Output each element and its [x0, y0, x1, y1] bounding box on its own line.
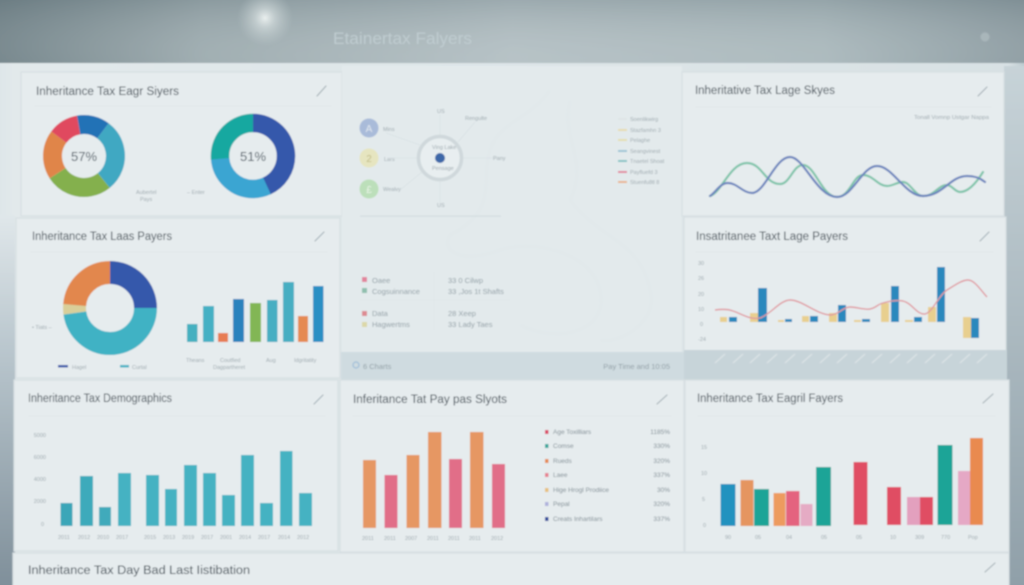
panel: demographics: [14, 380, 338, 551]
light glare: [237, 0, 293, 46]
panel heading: Inheritance Tax Eagril Fayers: [697, 393, 843, 405]
panel heading: Insatritanee Taxt Lage Payers: [696, 231, 848, 243]
data table: 33 ,Jos 1t Shafts: [448, 287, 504, 296]
x axis labels: 2015: [144, 535, 156, 541]
x axis labels: [725, 535, 978, 541]
panel heading: Inheritance Tax Day Bad Last Iistibation: [28, 565, 250, 577]
hub diagram: Wealvy: [383, 187, 401, 193]
x axis labels: 2012: [78, 535, 90, 541]
panel: grouped bars: [685, 380, 1009, 552]
status band: Pay Time and 10:05: [603, 362, 670, 371]
right legend: Seangvinest: [630, 149, 661, 155]
bar chart: [363, 432, 505, 528]
legend list: 320%: [653, 501, 670, 508]
panel: donut charts top left: [21, 72, 342, 216]
x axis labels: 2017: [258, 535, 270, 541]
legend list: 337%: [653, 516, 670, 523]
left node icons: [360, 118, 378, 138]
bar chart: Dagpartheret: [213, 365, 246, 371]
hub diagram: Ving Lake: [432, 145, 456, 151]
legend list: Creats Inhartilars: [553, 516, 603, 523]
right legend: Tnaetel Shoat: [630, 159, 665, 165]
data table: 28 Xeep: [448, 309, 476, 318]
x axis labels: 2011: [384, 536, 396, 542]
blue bars: [729, 267, 979, 338]
bar chart: Coutfied: [220, 358, 240, 364]
header icon: [980, 32, 990, 42]
x axis labels: 90: [725, 535, 731, 541]
panel: donut charts top left: – Enter: [187, 190, 205, 196]
y axis labels: 0: [700, 322, 703, 328]
x axis labels: 309: [915, 535, 924, 541]
donut chart 51%: [220, 123, 286, 189]
edit icon: [315, 232, 324, 241]
status band: 6 Charts: [363, 362, 392, 371]
faint map outline: [447, 90, 652, 341]
legend list: 330%: [653, 443, 670, 450]
x axis labels: 2012: [297, 535, 309, 541]
legend list: Hige Hrogl Prodiice: [553, 487, 609, 494]
hub diagram: Lars: [384, 157, 395, 163]
edit icon: [657, 395, 667, 404]
y axis labels: 20: [698, 292, 704, 298]
data table: 33 Lady Taes: [448, 320, 493, 329]
panel: center overview: [342, 66, 682, 353]
x axis labels: 2011: [427, 536, 439, 542]
y axis labels: -24: [698, 337, 706, 343]
donut value 57%: 57%: [71, 149, 97, 164]
donut chart: [74, 272, 146, 344]
x axis labels: 2007: [405, 536, 417, 542]
x axis labels: [58, 535, 309, 541]
x axis labels: [362, 536, 503, 542]
y axis labels: 0: [703, 523, 706, 529]
hub diagram: Pany: [493, 156, 506, 162]
panel heading: Inheritative Tax Lage Skyes: [695, 85, 835, 97]
bar chart: Theans: [186, 358, 205, 364]
y axis labels: 10: [701, 471, 707, 477]
hub diagram: US: [437, 203, 445, 209]
x axis labels: 10: [890, 535, 896, 541]
legend list: 320%: [653, 458, 670, 465]
y axis labels: 10: [698, 307, 704, 313]
bar chart: Idgritatity: [294, 358, 317, 364]
donut side label: • Tiats –: [32, 325, 53, 331]
donut legend: [58, 365, 147, 371]
edit icon: [314, 395, 323, 404]
y axis labels: [698, 261, 706, 343]
right legend: Pelaghe: [630, 138, 650, 144]
bar chart: Aug: [266, 358, 276, 364]
x axis labels: 05: [856, 535, 862, 541]
x axis labels: 05: [821, 535, 827, 541]
y axis labels: 5000: [34, 433, 46, 439]
x axis labels: 2017: [116, 535, 128, 541]
panel heading: Inferitance Tat Pay pas Slyots: [353, 394, 507, 406]
hatched band: [684, 350, 1007, 380]
x axis labels: 2011: [448, 536, 460, 542]
x axis labels: 2012: [491, 536, 503, 542]
panel: bar chart with legend: [340, 380, 684, 552]
y axis labels: [34, 433, 46, 528]
header bar: [0, 0, 1024, 63]
x axis labels: 2011: [58, 535, 70, 541]
panel heading: Inheritance Tax Demographics: [28, 393, 172, 405]
x axis labels: 2013: [163, 535, 175, 541]
data table: 33 0 Cilwp: [448, 276, 483, 285]
panel: donut and bars: [16, 218, 340, 378]
y axis labels: 15: [701, 445, 707, 451]
legend list: Laee: [553, 472, 568, 479]
x axis labels: 2001: [220, 535, 232, 541]
data table: Cogsuinnance: [372, 287, 420, 296]
legend list: Pepal: [553, 501, 570, 508]
x axis labels: 04: [786, 535, 792, 541]
panel: donut charts top left: Pays: [140, 197, 152, 203]
right legend: Stazfamhn 3: [630, 128, 661, 134]
x axis labels: 2010: [97, 535, 109, 541]
center ring: [418, 136, 462, 180]
trend line: [715, 280, 987, 318]
y axis labels: 0: [41, 522, 44, 528]
legend list: 30%: [657, 487, 670, 494]
donut legend: Hagel: [72, 365, 86, 371]
edit icon: [980, 232, 989, 241]
hub diagram: Mins: [383, 127, 395, 133]
y axis labels: 26: [698, 276, 704, 282]
legend list: 337%: [653, 472, 670, 479]
hub diagram: Rengulte: [465, 116, 487, 122]
y axis labels: 4000: [34, 477, 46, 483]
center dot: [435, 153, 445, 163]
hub diagram: Pensage: [432, 166, 454, 172]
legend list: Rueds: [553, 458, 573, 465]
y axis labels: 5: [702, 497, 705, 503]
data table: Hagwertms: [372, 320, 410, 329]
yellow bars: [720, 303, 971, 338]
x axis labels: 2011: [469, 536, 481, 542]
bar chart: [186, 282, 324, 371]
x axis labels: 2017: [201, 535, 213, 541]
panel: line chart: [682, 72, 1004, 216]
x axis labels: 770: [941, 535, 950, 541]
panel: bottom distribution: [13, 553, 1009, 585]
bar chart: [60, 451, 312, 526]
x axis labels: 05: [755, 535, 761, 541]
right legend: Soenlikwirg: [630, 117, 658, 123]
hub diagram: £: [366, 185, 372, 196]
hub diagram: US: [437, 109, 445, 115]
edit icon: [985, 563, 995, 572]
edit icon: [983, 394, 993, 403]
y axis labels: [701, 445, 707, 529]
legend list: Age Toxilliars: [553, 429, 592, 436]
right legend: Payfluefd 3: [630, 170, 658, 176]
panel: combo chart: [684, 217, 1006, 351]
status band: [341, 352, 684, 380]
donut value 51%: 51%: [240, 149, 266, 164]
hub diagram: 2: [366, 154, 372, 165]
donut chart 57%: [48, 120, 120, 192]
data table: [360, 272, 510, 330]
panel heading: Inheritance Tax Laas Payers: [32, 231, 172, 243]
chart caption: Tonall Vomnp Ustgar Nappa: [914, 115, 990, 121]
edit icon: [978, 87, 987, 96]
edit icon: [317, 86, 326, 96]
donut captions: Aubertel: [136, 190, 156, 196]
y axis labels: 2000: [34, 499, 46, 505]
x axis labels: 2019: [182, 535, 194, 541]
donut legend: Curtal: [132, 365, 147, 371]
right legend: [618, 117, 665, 186]
legend list: 1185%: [650, 429, 670, 436]
panel heading: Inheritance Tax Eagr Siyers: [36, 86, 179, 98]
x axis labels: 2014: [278, 535, 290, 541]
right legend: Stuenfu8tl 8: [630, 180, 659, 186]
legend list: [545, 429, 670, 523]
header title: Etainertax Falyers: [333, 29, 472, 48]
y axis labels: 6000: [34, 455, 46, 461]
line chart: [710, 157, 985, 197]
x axis labels: Pop: [968, 535, 978, 541]
x axis labels: 2014: [239, 535, 251, 541]
hub diagram: [360, 109, 506, 217]
x axis labels: 2011: [362, 536, 374, 542]
data table: Oaee: [372, 276, 390, 285]
hub diagram: A: [366, 124, 373, 135]
y axis labels: 30: [698, 261, 704, 267]
data table: Data: [372, 309, 389, 318]
legend list: Comse: [553, 443, 574, 450]
bar chart: [720, 438, 983, 526]
spokes: [386, 115, 493, 202]
